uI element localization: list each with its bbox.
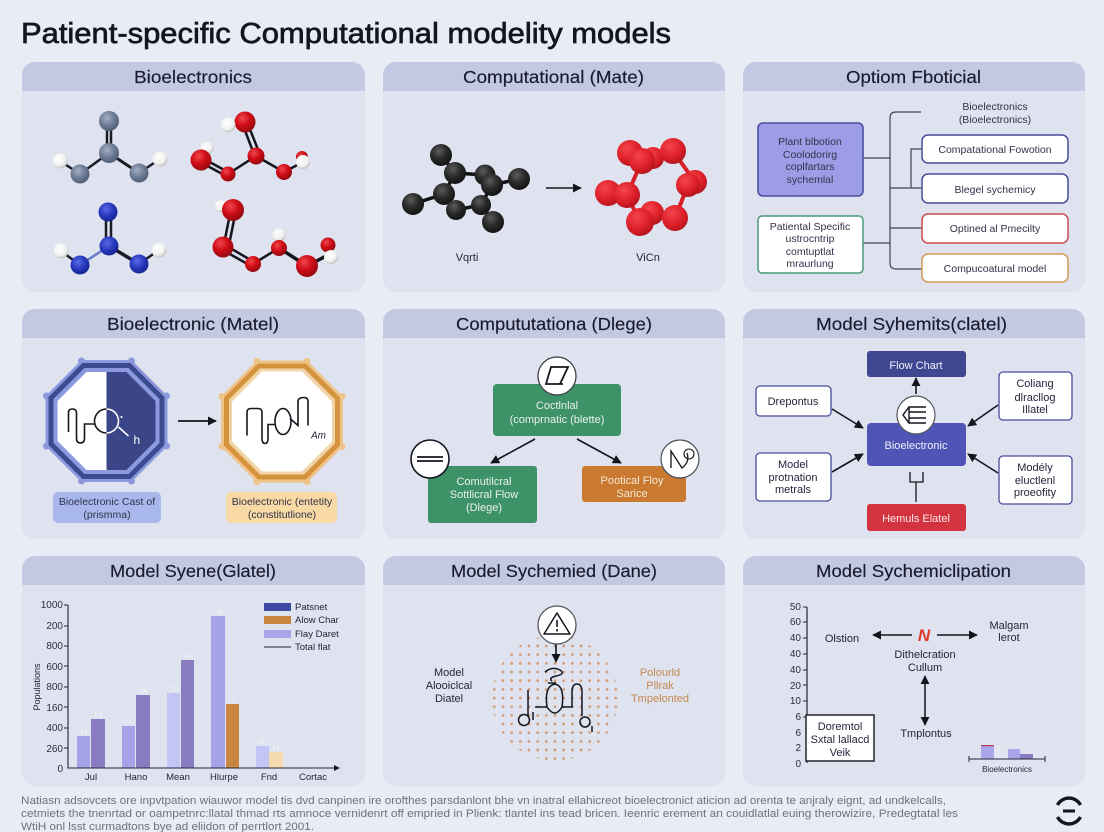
icon: logo — [1058, 798, 1080, 824]
box: modely: proeofity — [1014, 487, 1057, 499]
box: computational — [922, 135, 1068, 163]
box: flow chart: Flow Chart — [889, 360, 943, 372]
molecule: grey — [52, 111, 168, 184]
label: malgam — [989, 620, 1029, 644]
icon: warning — [538, 606, 576, 644]
label: Vqrti: Vqrti — [456, 252, 478, 264]
label: Bioelectronics: (Bioelectronics) — [959, 114, 1031, 126]
bar chart: Cortac — [299, 772, 327, 783]
box: bioelectronic hub: Bioelectronic — [885, 440, 948, 452]
label: model alooiclcal: Alooiclcal — [426, 680, 472, 692]
box: top green — [493, 384, 621, 436]
bar chart: 11 — [80, 727, 88, 736]
callout box: Veik — [830, 747, 851, 759]
box: biogel — [922, 174, 1068, 203]
box: optined — [922, 214, 1068, 243]
box: optined: Optined al Pmecilty — [950, 223, 1041, 235]
label: tmplontus: Tmplontus — [900, 728, 952, 740]
box: model promotion — [756, 453, 831, 501]
arrows from top node — [491, 439, 621, 463]
box: right orange: Sarice — [616, 488, 648, 500]
panel: computational flow — [383, 309, 725, 539]
box: model promotion: protnation — [769, 472, 817, 484]
circuit squiggle — [518, 668, 592, 732]
callout box: Sxtal lallacd — [811, 734, 869, 746]
dot field — [492, 635, 618, 761]
y axis — [790, 602, 807, 770]
footer text block: Natiasn adsovcets ore inpvtpation wiauwor model tis dvd canpinen ire orofthes parsdanlont bhe vn inatral ellahicreot bioelectronict aticion ad orenta te anjraly eignt, ad undkelcalls, — [21, 795, 946, 807]
bar chart: Mean — [166, 772, 190, 783]
bar chart: Jul — [85, 772, 97, 783]
molecule: red upper — [190, 112, 310, 182]
heading: Computational (Mate): Computational (Mate) — [463, 67, 644, 87]
footer text block — [21, 795, 958, 832]
box: model promotion: Model — [778, 459, 808, 471]
box: left green: Comutilcral — [456, 476, 512, 488]
box: purple source — [758, 123, 863, 196]
box: purple source: Coolodorirg — [783, 149, 837, 161]
label: malgam: Malgam — [989, 620, 1029, 632]
label: orange caption: (constitutlione) — [248, 509, 316, 521]
label: blue caption: (prismma) — [83, 509, 131, 521]
mini bar chart — [969, 745, 1045, 774]
icon: red N: N — [918, 626, 931, 645]
box: drepontus — [756, 386, 831, 416]
box: modely: Modély — [1017, 462, 1053, 474]
box: left green: (Dlege) — [466, 502, 502, 514]
box: coliang: dlracllog — [1015, 392, 1055, 404]
octagon: blue half-filled: h — [134, 433, 140, 447]
bar chart: Hano — [125, 772, 147, 783]
heading: Compututationa (Dlege): Compututationa (Dlege) — [456, 314, 652, 334]
box: top green: (comprnatic (blette) — [510, 414, 604, 426]
bar chart: 800 — [46, 641, 63, 652]
title: Patient-specific Computational modelity models — [21, 18, 671, 50]
heading: Model Sychemiclipation: Model Sychemiclipation — [816, 561, 1011, 581]
icon: hub symbol — [897, 396, 935, 434]
label: model alooiclcal: Diatel — [435, 693, 463, 705]
icon: equals — [411, 440, 449, 478]
box: flow chart — [867, 351, 966, 377]
legend: Patsnet — [295, 602, 328, 613]
label: orange caption: Bioelectronic (entetity — [232, 496, 333, 508]
label: polourld: Tmpelonted — [631, 693, 689, 705]
arrow: blue to orange — [178, 420, 216, 422]
bar chart: 11 — [272, 743, 280, 752]
molecule: black — [402, 144, 530, 233]
octagon: blue half-filled — [43, 358, 170, 484]
panel: model risk diagram — [383, 556, 725, 786]
bar chart: 14 — [183, 651, 191, 660]
y axis: 40 — [790, 649, 801, 660]
box: computational: Compatational Fowotion — [938, 144, 1052, 156]
box: biogel: Blegel sychemicy — [954, 184, 1036, 196]
footer text block: cetmiets the tnenrtad or oampetnrc:llatal thmad rts amnoce vernidenrt off empried in Plienk: tlantel ins tead bricen. Ieenric erement an couidlatlal euing therowizire, Predegtatal les — [21, 808, 958, 820]
panel: option flow tree — [743, 62, 1085, 292]
bar chart: 1000 — [41, 600, 63, 611]
heading: Model Syhemits(clatel): Model Syhemits(clatel) — [816, 314, 1007, 334]
panel: computational molecules — [383, 62, 725, 292]
label: olstion: Olstion — [825, 633, 859, 645]
label: dithelcration: Dithelcration — [894, 649, 956, 661]
panel: model diagram with axis — [743, 556, 1085, 786]
bar chart: 16 — [170, 684, 178, 693]
box: modely — [999, 456, 1072, 504]
box: green source: ustrocntrip — [785, 233, 835, 245]
box: green source: mraurlung — [786, 258, 834, 270]
bar chart: 0 — [57, 764, 63, 775]
box: modely: eluctlenl — [1015, 475, 1055, 487]
bar chart: 12 — [124, 717, 132, 726]
label: Bioelectronics — [959, 101, 1031, 126]
label: polourld: Polourld — [640, 667, 680, 679]
box: coliang: Illatel — [1022, 404, 1048, 416]
box: bioelectronic hub — [867, 423, 966, 466]
panel: bioelectronic octagons — [22, 309, 365, 539]
box: top green: Coctlnlal — [536, 400, 578, 412]
bar chart: 14 — [139, 686, 147, 695]
box: compucoatural: Compucoatural model — [944, 263, 1046, 275]
bar chart: 12 — [228, 695, 236, 704]
y axis: 50 — [790, 602, 801, 613]
bar chart: 200 — [46, 621, 63, 632]
heading: Optiom Fboticial: Optiom Fboticial — [846, 67, 981, 87]
molecule: red — [595, 138, 707, 236]
box: left green: Sottlicral Flow — [450, 489, 518, 501]
arrow: warning to circuit — [555, 643, 557, 662]
mini bar chart: Bioelectronics — [982, 765, 1032, 774]
box: purple source: coplfartars — [785, 161, 835, 173]
bar chart: 160 — [46, 703, 63, 714]
bar chart: 260 — [46, 744, 63, 755]
callout box — [806, 715, 874, 761]
box: model promotion: metrals — [775, 484, 812, 496]
bar chart: 13 — [94, 710, 102, 719]
icon: parallelogram — [538, 357, 576, 395]
legend: Total flat — [295, 642, 331, 653]
legend: Flay Daret — [295, 629, 339, 640]
panel: model schematic hub — [743, 309, 1085, 539]
heading: Model Syene(Glatel): Model Syene(Glatel) — [110, 561, 276, 581]
box: coliang — [999, 372, 1072, 420]
label: polourld — [631, 667, 689, 705]
box: left green — [428, 466, 537, 523]
octagon: orange: Am — [310, 430, 326, 442]
label: blue caption: Bioelectronic Cast of — [59, 496, 155, 508]
legend — [264, 602, 339, 653]
label: dithelcration: Cullum — [908, 662, 942, 674]
box: green source: comtuptlat — [786, 246, 834, 258]
icon: formula — [661, 440, 699, 478]
bar chart: 600 — [46, 662, 63, 673]
box: purple source: sychemlal — [787, 174, 833, 186]
box: hemuls elatel: Hemuls Elatel — [882, 513, 950, 525]
box: green source — [758, 216, 863, 273]
bar chart: 400 — [46, 723, 63, 734]
y axis: 2 — [795, 743, 801, 754]
arrow: left — [873, 634, 912, 636]
bar chart — [32, 600, 340, 783]
label: dithelcration — [894, 649, 956, 674]
y axis: 40 — [790, 633, 801, 644]
box: coliang: Coliang — [1016, 378, 1054, 390]
molecule: red lower — [212, 199, 338, 277]
legend: Alow Char — [295, 615, 339, 626]
box: green source: Patiental Specific — [770, 221, 850, 233]
bar chart: Populations — [32, 663, 42, 711]
arrows to hub — [832, 378, 998, 502]
heading: Model Sychemied (Dane): Model Sychemied (Dane) — [451, 561, 657, 581]
label: polourld: Pllrak — [646, 680, 674, 692]
box: drepontus: Drepontus — [768, 396, 819, 408]
label: orange caption — [226, 492, 337, 523]
bar chart: 18 — [214, 607, 222, 616]
panel: bioelectronics molecules — [22, 62, 365, 292]
bar chart: Fnd — [261, 772, 277, 783]
label: ViCn: ViCn — [636, 252, 660, 264]
label: blue caption — [53, 492, 161, 523]
connector lines — [863, 112, 922, 269]
molecule: blue — [54, 202, 166, 274]
box: right orange: Pootical Floy — [601, 475, 664, 487]
label: malgam: lerot — [998, 632, 1020, 644]
arrow: vertical double — [924, 676, 926, 725]
y axis: 10 — [790, 696, 801, 707]
box: purple source: Plant blbotion — [778, 136, 842, 148]
label: Bioelectronics: Bioelectronics — [962, 101, 1028, 113]
heading: Bioelectronic (Matel): Bioelectronic (Matel) — [107, 314, 279, 334]
octagon: orange — [218, 358, 346, 485]
y axis: 20 — [790, 681, 801, 692]
label: model alooiclcal: Model — [434, 667, 464, 679]
bar chart: 11 — [258, 737, 266, 746]
y axis: 6 — [795, 712, 801, 723]
arrow: right — [937, 634, 977, 636]
box: compucoatural — [922, 254, 1068, 282]
y axis: 40 — [790, 665, 801, 676]
label: model alooiclcal — [426, 667, 472, 705]
y axis: 0 — [795, 759, 801, 770]
arrow: black to red — [546, 187, 581, 189]
panel: bar chart — [22, 556, 365, 786]
box: hemuls elatel — [867, 504, 966, 531]
heading: Bioelectronics: Bioelectronics — [134, 67, 252, 87]
y axis: 60 — [790, 617, 801, 628]
box: right orange — [582, 466, 686, 502]
callout box: Doremtol — [818, 721, 862, 733]
y axis: 6 — [795, 728, 801, 739]
bar chart: Hlurpe — [210, 772, 238, 783]
bar chart: 800 — [46, 682, 63, 693]
